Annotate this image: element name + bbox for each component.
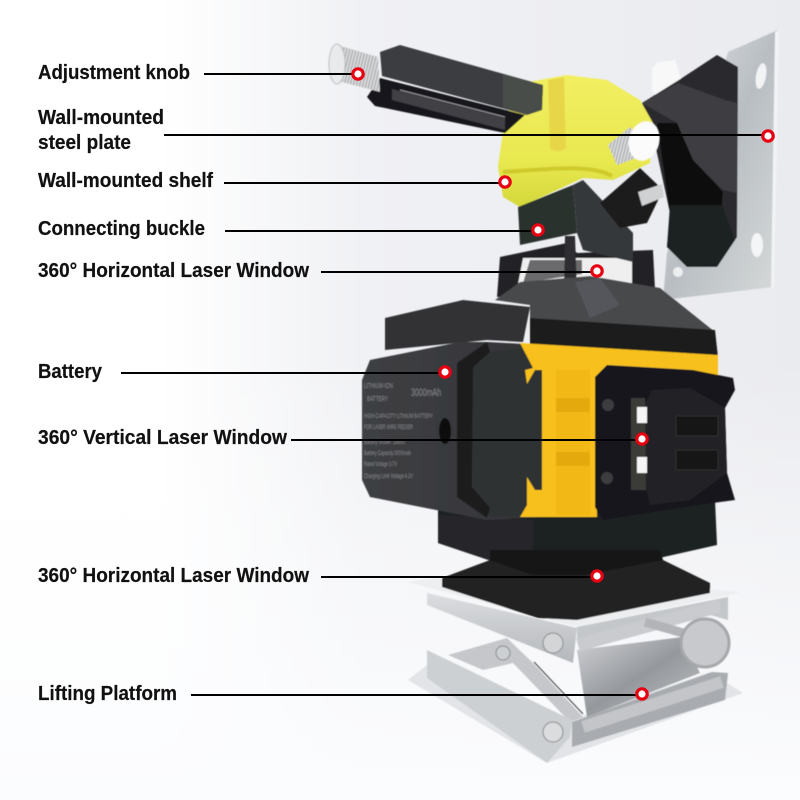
callout: Adjustment knob: Adjustment knob bbox=[38, 62, 190, 84]
wall mount bracket bbox=[642, 55, 738, 267]
battery print bbox=[364, 383, 441, 480]
callout: Lifting Platform: Lifting Platform bbox=[38, 683, 177, 705]
wall-mounted steel plate bbox=[652, 30, 779, 300]
upper arm with slot bbox=[367, 45, 543, 133]
vertical laser window cover bbox=[595, 365, 735, 520]
callout: Wall-mounted steel plate bbox=[38, 107, 773, 154]
adjustment wheel bbox=[681, 619, 729, 667]
platform top plate bbox=[408, 570, 742, 663]
battery print: Charging Limit Voltage:4.2V bbox=[364, 474, 413, 480]
tripod bracket bbox=[497, 236, 655, 297]
yellow frame bbox=[520, 343, 718, 517]
battery print: 3000mAh bbox=[411, 387, 441, 399]
callout: Connecting buckle bbox=[38, 218, 543, 240]
callout: Adjustment knob bbox=[38, 62, 363, 84]
black mount plate bbox=[442, 550, 710, 620]
battery print: HIGH CAPACITY LITHIUM BATTERY bbox=[364, 413, 433, 420]
callout: 360° Vertical Laser Window bbox=[38, 427, 647, 449]
battery print: Battery Capacity:3000mah bbox=[364, 451, 411, 457]
battery print: LITHIUM-ION bbox=[364, 383, 393, 390]
callout: 360° Horizontal Laser Window (lower): 360° Horizontal Laser Window bbox=[38, 565, 309, 587]
lifting platform bbox=[408, 550, 743, 763]
callout: Battery: Battery bbox=[38, 361, 103, 383]
rods bbox=[578, 606, 722, 727]
callout: Lifting Platform bbox=[38, 683, 647, 705]
callout: 360° Vertical Laser Window: 360° Vertical Laser Window bbox=[38, 427, 287, 449]
adjustment knob bbox=[329, 44, 380, 92]
platform left rail bbox=[427, 650, 572, 763]
platform right rail bbox=[572, 672, 728, 747]
battery print: Battery Model: 18650 bbox=[364, 440, 405, 446]
callout: Wall-mounted steel plate: Wall-mounted bbox=[38, 107, 164, 129]
platform middle bbox=[448, 637, 700, 722]
connecting buckle bbox=[518, 168, 664, 262]
callout: Wall-mounted shelf: Wall-mounted shelf bbox=[38, 170, 213, 192]
callout: Battery bbox=[38, 361, 450, 383]
battery bbox=[362, 342, 542, 520]
product photo: laser level on lifting platform bbox=[329, 30, 779, 763]
screws bbox=[496, 633, 563, 742]
callout: 360° Horizontal Laser Window (upper) bbox=[38, 260, 602, 282]
head housing with shelf bbox=[385, 276, 718, 358]
callout: Wall-mounted shelf bbox=[38, 170, 510, 192]
battery print: BATTERY bbox=[367, 396, 388, 403]
wall-mounted shelf: yellow drum bbox=[498, 75, 664, 207]
laser body base bbox=[438, 500, 717, 575]
front knob body bbox=[608, 127, 650, 165]
platform base plate bbox=[408, 665, 743, 763]
callout: Connecting buckle: Connecting buckle bbox=[38, 218, 205, 240]
battery print: Rated Voltage:3.7V bbox=[364, 462, 397, 468]
battery print: FOR LASER WIRE FEEDER bbox=[364, 424, 413, 431]
callout: Wall-mounted steel plate: steel plate bbox=[38, 132, 131, 154]
callout: 360° Horizontal Laser Window (upper): 360° Horizontal Laser Window bbox=[38, 260, 309, 282]
callout: 360° Horizontal Laser Window (lower) bbox=[38, 565, 602, 587]
